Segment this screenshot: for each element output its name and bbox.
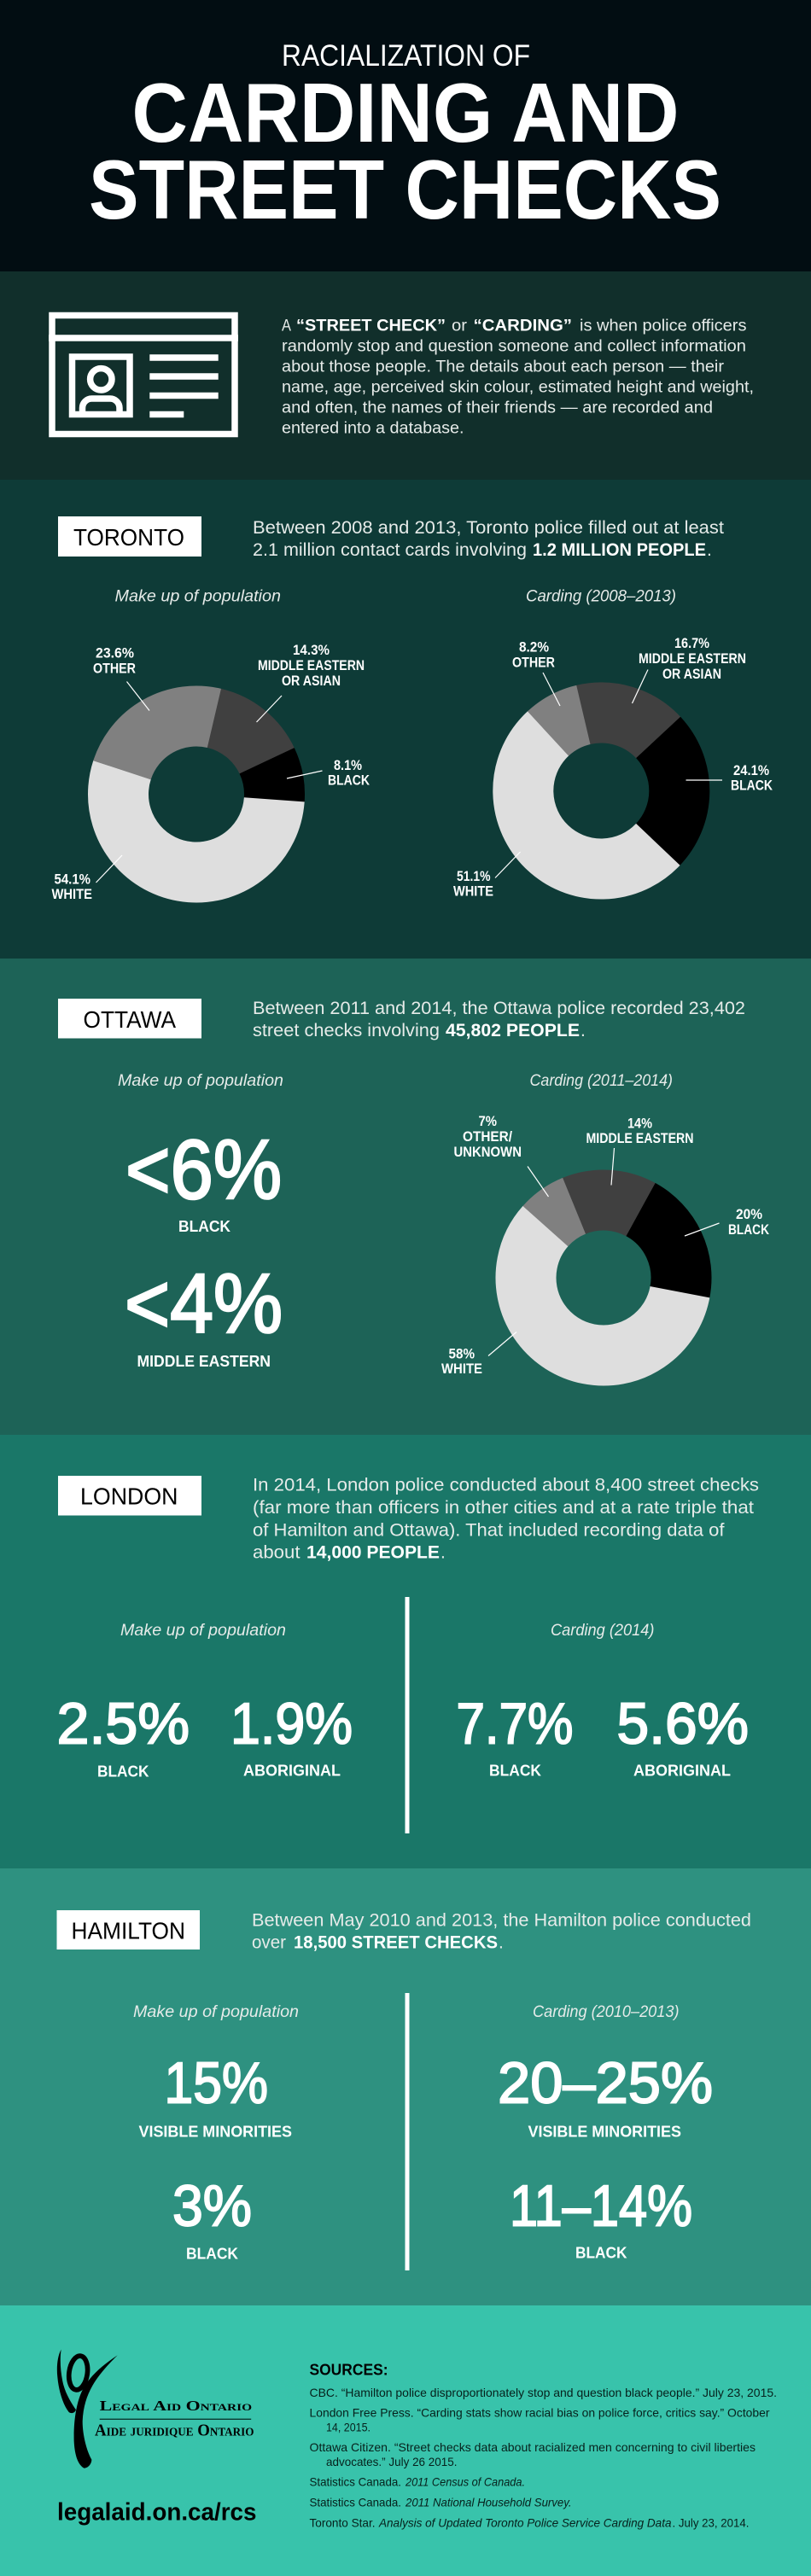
donut labels: Toronto population: OTHER [93,661,136,676]
stat: population black: 2.5% [56,1692,190,1757]
donut labels: Ottawa carding: UNKNOWN [454,1145,522,1160]
donut labels: Ottawa carding: 20% [736,1207,762,1222]
donut labels: Toronto carding: OTHER [512,656,555,671]
definition text: entered into a database. [282,420,464,437]
divider [405,1993,410,2270]
donut labels: Toronto population [51,643,370,902]
subheading: carding: Carding (2010–2013) [533,2003,680,2021]
sources list: CBC. “Hamilton police disproportionately stop and question black people.” July 23, 2015. [309,2386,777,2399]
website url: legalaid.on.ca/rcs [57,2499,256,2526]
donut labels: Ottawa carding: OTHER/ [463,1129,512,1145]
definition text: or [452,318,468,335]
Ottawa intro text: 45,802 PEOPLE [446,1021,580,1040]
donut labels: Toronto population: 54.1% [55,872,90,888]
icon: id card [49,316,238,434]
stat: carding visible minorities: VISIBLE MINORITIES [528,2122,681,2141]
sources list: Analysis of Updated Toronto Police Service Carding Data [378,2516,672,2530]
Toronto intro text: . [707,540,712,560]
donut labels: Toronto carding: 8.2% [519,640,549,656]
sources list [309,2361,777,2530]
stat: carding black: 7.7% [456,1692,574,1757]
stat: carding visible minorities: 20–25% [498,2050,713,2115]
subheading: carding: Carding (2008–2013) [526,587,676,606]
sources list: 2011 National Household Survey. [405,2496,572,2509]
definition text: name, age, perceived skin colour, estimated height and weight, [282,379,754,396]
sources list: London Free Press. “Carding stats show racial bias on police force, critics say.” October [309,2405,770,2419]
subheading: carding: Carding (2011–2014) [529,1072,673,1090]
stat: carding aboriginal: ABORIGINAL [633,1762,731,1779]
Ottawa label [58,999,201,1038]
donut labels: Ottawa carding: 7% [478,1114,497,1129]
panel: Toronto [0,480,811,959]
donut labels: Toronto population: WHITE [51,887,92,902]
London intro text: (far more than officers in other cities and at a rate triple that [253,1498,754,1518]
sources list: SOURCES: [309,2361,388,2378]
Ottawa intro text [253,999,745,1040]
donut labels: Toronto population: 14.3% [293,643,330,658]
stat: middle eastern population: MIDDLE EASTERN [137,1352,271,1370]
donut labels: Toronto population: BLACK [328,773,370,789]
stat: population visible minorities [138,2050,292,2141]
logo text [95,2398,254,2439]
stat: black population: <6% [125,1122,282,1216]
Hamilton label [56,1910,200,1949]
sources list: Statistics Canada. [309,2475,401,2489]
donut chart: Ottawa carding [493,1168,714,1388]
logo text: Aide juridique Ontario [95,2421,254,2439]
subheading: carding: Carding (2014) [551,1622,654,1640]
stat: black population: BLACK [178,1217,231,1235]
definition text: and often, the names of their friends — are recorded and [282,399,713,417]
definition text: is when police officers [580,318,746,335]
title kicker: RACIALIZATION OF [282,39,530,73]
Hamilton label: HAMILTON [72,1917,185,1944]
Ottawa intro text: Between 2011 and 2014, the Ottawa police recorded 23,402 [253,999,745,1018]
donut labels: Ottawa carding: 58% [449,1347,475,1362]
Toronto intro text: 2.1 million contact cards involving [253,540,527,560]
stat: population aboriginal: ABORIGINAL [243,1762,341,1779]
Toronto intro text [253,518,724,560]
Hamilton intro text [252,1910,751,1953]
definition text: A [282,318,291,335]
Hamilton intro text: over [252,1932,286,1953]
donut labels: Toronto carding: BLACK [731,778,773,794]
stat: population black: BLACK [186,2245,239,2262]
Toronto intro text: Between 2008 and 2013, Toronto police filled out at least [253,518,724,538]
stat: middle eastern population: <4% [125,1256,283,1350]
donut labels: Ottawa carding: 14% [627,1116,652,1132]
London intro text: of Hamilton and Ottawa). That included recording data of [253,1521,725,1540]
sources list: Statistics Canada. [309,2496,401,2509]
stat: population black: BLACK [97,1762,149,1780]
Toronto label: TORONTO [73,524,184,551]
logo text: Legal Aid Ontario [100,2398,252,2414]
stat: population black: 3% [172,2173,252,2238]
panel: definition [0,271,811,480]
donut chart: Toronto carding [491,680,712,901]
donut labels: Ottawa carding: MIDDLE EASTERN [586,1131,693,1146]
panel: Ottawa [0,959,811,1435]
stat: carding black [456,1692,574,1779]
subheading: make up of population: Make up of population [133,2003,299,2021]
Hamilton intro text: Between May 2010 and 2013, the Hamilton police conducted [252,1910,751,1931]
London intro text: In 2014, London police conducted about 8,400 street checks [253,1475,759,1495]
stat: carding black [510,2173,692,2262]
Ottawa intro text: street checks involving [253,1021,440,1040]
donut labels: Toronto population: 23.6% [96,645,134,661]
donut labels: Toronto carding: OR ASIAN [662,667,721,682]
donut labels: Toronto carding [453,636,773,900]
main title: CARDING AND [131,66,680,160]
Hamilton intro text: 18,500 STREET CHECKS [294,1932,498,1953]
London intro text: 14,000 PEOPLE [306,1543,440,1562]
donut chart: Toronto population [92,691,300,898]
Hamilton intro text: . [499,1932,504,1953]
stat: carding aboriginal: 5.6% [616,1692,749,1757]
London label: LONDON [80,1483,178,1509]
definition text: “CARDING” [473,318,572,335]
definition text: about those people. The details about each person — their [282,358,725,376]
Ottawa intro text: . [581,1021,586,1040]
definition text [282,318,754,437]
sources list: . July 23, 2014. [673,2516,750,2530]
main title: STREET CHECKS [89,143,721,236]
donut labels: Ottawa carding: WHITE [441,1361,482,1377]
donut labels: Toronto carding: MIDDLE EASTERN [639,651,746,667]
donut labels: Toronto carding: 16.7% [674,636,709,651]
stat: population visible minorities: VISIBLE MINORITIES [138,2122,292,2141]
subheading: make up of population: Make up of population [118,1072,283,1090]
divider [405,1597,410,1833]
stat: population visible minorities: 15% [164,2050,268,2115]
Toronto intro text: 1.2 MILLION PEOPLE [533,540,706,560]
icon: figure [57,2350,118,2468]
panel: Hamilton [0,1868,811,2305]
panel: header [0,0,811,271]
London intro text: about [253,1543,300,1562]
donut labels: Toronto population: OR ASIAN [282,673,341,689]
stat: population aboriginal [230,1692,353,1779]
donut labels: Toronto carding: 51.1% [457,869,491,884]
sources list: advocates.” July 26 2015. [326,2455,458,2468]
stat: carding black: BLACK [575,2243,627,2262]
donut labels: Ottawa carding [441,1114,769,1377]
sources list: Ottawa Citizen. “Street checks data about racialized men concerning to civil liberties [309,2440,756,2454]
panel: London [0,1435,811,1868]
donut labels: Toronto population: 8.1% [334,758,362,773]
main title [89,66,721,236]
panel: footer [0,2305,811,2576]
sources list: 2011 Census of Canada. [405,2475,525,2489]
logo: Legal Aid Ontario [57,2350,254,2468]
subheading: make up of population: Make up of population [120,1622,286,1640]
definition text: randomly stop and question someone and collect information [282,338,746,355]
donut labels: Ottawa carding: BLACK [728,1222,769,1238]
London intro text: . [441,1543,446,1562]
definition text: “STREET CHECK” [296,318,446,335]
stat: carding black: 11–14% [510,2173,692,2238]
London label [58,1476,201,1516]
London intro text [253,1475,759,1562]
stat: carding black: BLACK [489,1762,542,1779]
stat: population aboriginal: 1.9% [230,1692,353,1757]
sources list: 14, 2015. [326,2421,370,2434]
donut labels: Toronto carding: 24.1% [733,763,769,778]
donut labels: Toronto population: MIDDLE EASTERN [258,658,365,673]
subheading: make up of population: Make up of population [114,587,281,606]
Toronto label [58,516,201,557]
Ottawa label: OTTAWA [84,1006,176,1033]
sources list: Toronto Star. [309,2516,376,2530]
donut labels: Toronto carding: WHITE [453,884,493,900]
